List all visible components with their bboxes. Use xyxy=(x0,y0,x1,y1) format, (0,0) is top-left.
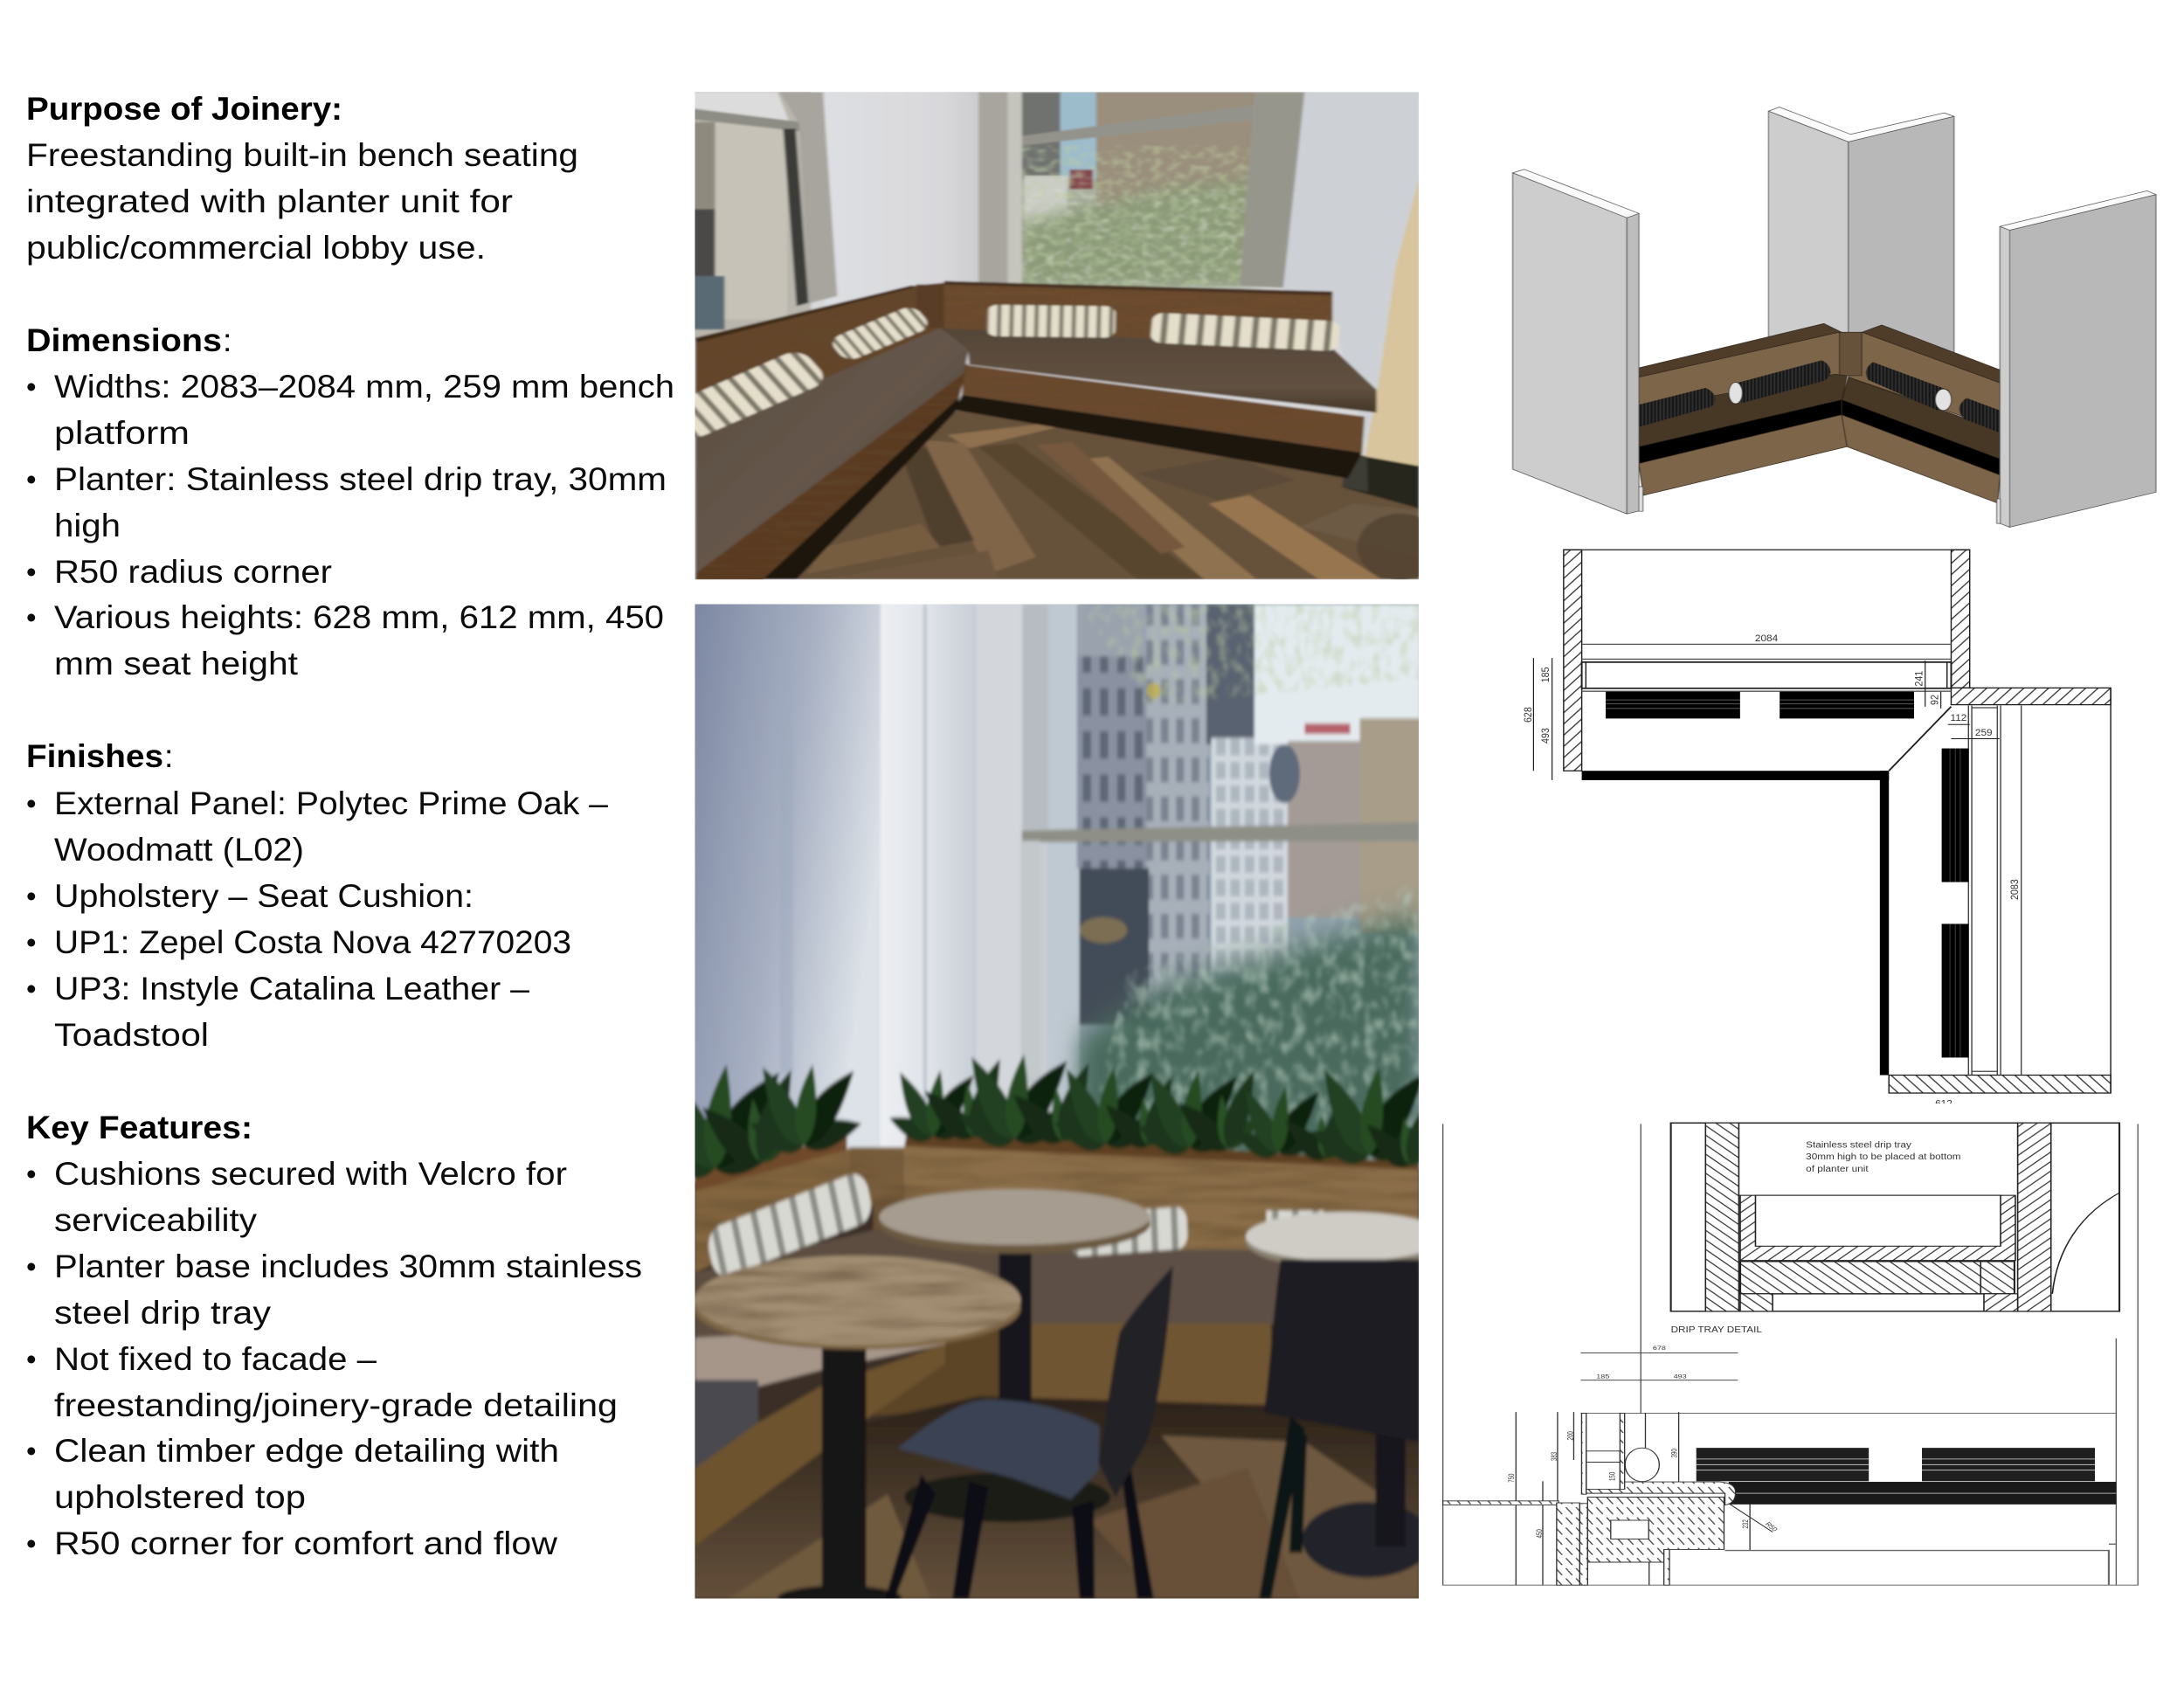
list: key features: steel drip tray xyxy=(54,1294,271,1331)
text block: purpose xyxy=(26,136,578,266)
list: dimensions: Widths: 2083–2084 mm, 259 mm bench xyxy=(54,368,674,405)
drip tray note xyxy=(1806,1139,1961,1173)
section dimension labels: 383 xyxy=(1550,1452,1559,1461)
list: dimensions: Various heights: 628 mm, 612 mm, 450 xyxy=(54,598,664,635)
section dimension labels: 232 xyxy=(1741,1519,1750,1529)
drip tray note: 30mm high to be placed at bottom xyxy=(1806,1151,1961,1161)
section dimension labels: 493 xyxy=(1674,1373,1687,1380)
heading: finishes: : xyxy=(164,737,173,774)
bench back lines xyxy=(1582,644,2022,1076)
section dimension labels: 678 xyxy=(1653,1346,1666,1352)
section dimension labels: 200 xyxy=(1565,1431,1575,1440)
table pedestals xyxy=(778,1236,1432,1611)
panel: specification text xyxy=(26,90,674,1561)
dimension labels: 493 xyxy=(1540,728,1552,744)
kick plinth xyxy=(955,395,1362,479)
list: finishes: • xyxy=(26,972,37,1005)
plants xyxy=(641,1046,1441,1185)
left window view xyxy=(681,79,837,340)
section bolsters and seat band xyxy=(1697,1448,2116,1505)
list: finishes: External Panel: Polytec Prime Oak – xyxy=(54,785,608,821)
list: key features: Planter base includes 30mm stainless xyxy=(54,1248,642,1284)
section dimension labels: R50 xyxy=(1763,1521,1780,1532)
list: key features: Clean timber edge detailing with xyxy=(54,1432,559,1469)
rear corner panels xyxy=(1768,107,1954,352)
list: dimensions: high xyxy=(54,507,121,543)
list: finishes: Toadstool xyxy=(54,1016,209,1053)
seat nose section xyxy=(1586,1482,1736,1505)
centre window view xyxy=(978,92,1310,287)
dimension labels: 2084 xyxy=(1755,633,1778,644)
drip tray note: of planter unit xyxy=(1806,1163,1869,1173)
section dimension labels: 750 xyxy=(1507,1474,1516,1483)
list: dimensions: mm seat height xyxy=(54,645,299,681)
dimension labels: 241 xyxy=(1914,671,1925,687)
baseboard xyxy=(1343,457,1420,508)
heading: dimensions: : xyxy=(223,322,232,358)
photo: corner bench with striped bolsters xyxy=(695,92,1419,580)
section dimension labels: 390 xyxy=(1669,1449,1679,1457)
section dimension labels: 150 xyxy=(1607,1472,1617,1481)
heading: dimensions: Dimensions xyxy=(26,322,222,358)
drip tray note: Stainless steel drip tray xyxy=(1806,1139,1911,1150)
dimension labels: 259 xyxy=(1975,729,1993,738)
list: key features: Not fixed to facade – xyxy=(54,1340,377,1377)
black seat edge xyxy=(1582,771,1889,1076)
mulch xyxy=(904,1132,1419,1169)
photo: cafe tables and planter bench at window xyxy=(695,605,1419,1599)
list: dimensions: • xyxy=(26,556,37,588)
dimension labels: 612 xyxy=(1935,1099,1952,1109)
dimension labels: 185 xyxy=(1540,667,1552,682)
black chairs xyxy=(885,1259,1419,1599)
timber back panels xyxy=(695,281,1365,580)
window sash xyxy=(1021,605,1419,1121)
list: key features: freestanding/joinery-grade detailing xyxy=(54,1387,618,1423)
list: finishes: Woodmatt (L02) xyxy=(54,831,304,868)
dimension labels: 112 xyxy=(1951,713,1966,723)
left wall panel xyxy=(1513,169,1643,514)
right wall xyxy=(1283,92,1420,481)
list: key features: • xyxy=(26,1250,37,1283)
caption: DRIP TRAY DETAIL xyxy=(1671,1325,1762,1335)
heading: finishes: Finishes xyxy=(26,737,163,774)
striped bolsters xyxy=(705,1169,1324,1281)
right wall panel xyxy=(1997,190,2156,527)
list: dimensions: • xyxy=(26,601,37,633)
list: finishes: UP3: Instyle Catalina Leather – xyxy=(54,970,529,1007)
list: finishes: UP1: Zepel Costa Nova 42770203 xyxy=(54,924,571,960)
plaster wall xyxy=(681,594,1051,1181)
list: dimensions: Planter: Stainless steel drip tray, 30mm xyxy=(54,460,667,497)
list: dimensions xyxy=(26,368,674,681)
list: key features: • xyxy=(26,1343,37,1375)
list: key features: • xyxy=(26,1435,37,1467)
text block: purpose: public/commercial lobby use. xyxy=(26,229,486,266)
dimension lines xyxy=(1533,658,2000,780)
list: dimensions: platform xyxy=(54,414,190,451)
drip tray detail xyxy=(1671,1123,2119,1311)
drawing: isometric view of bench between wall panels xyxy=(1511,107,2158,528)
list: dimensions: • xyxy=(26,463,37,495)
bolster cushions xyxy=(1606,692,1968,1057)
timber bench body xyxy=(1639,323,2000,503)
street view xyxy=(1048,594,1422,1168)
heading: purpose of joinery: Purpose of Joinery: xyxy=(26,90,342,127)
list: finishes: • xyxy=(26,926,37,958)
ribbed bolsters xyxy=(1639,360,2000,432)
bench backrest, seat and front xyxy=(695,1230,1281,1546)
list: key features: • xyxy=(26,1158,37,1190)
dimension labels: 92 xyxy=(1930,695,1941,705)
dimension labels: 628 xyxy=(1524,707,1534,723)
section dimension labels xyxy=(1507,1346,1780,1538)
leather seat xyxy=(695,328,968,574)
floor xyxy=(763,408,1444,580)
list: finishes: Upholstery – Seat Cushion: xyxy=(54,877,473,914)
text block: purpose: integrated with planter unit for xyxy=(26,183,513,219)
heading: key features: Key Features: xyxy=(26,1109,252,1145)
section through bench xyxy=(1443,1124,2138,1585)
dimension labels xyxy=(1524,633,2021,1109)
section dimension labels: 185 xyxy=(1596,1373,1609,1380)
list: finishes: • xyxy=(26,787,37,820)
list: key features xyxy=(26,1155,642,1561)
list: finishes xyxy=(26,785,608,1053)
dimension labels: 2083 xyxy=(2009,879,2021,900)
table tops xyxy=(694,1189,1445,1349)
list: key features: Cushions secured with Velcro for xyxy=(54,1155,567,1192)
striped bolster cushions xyxy=(660,304,1340,442)
planter timber xyxy=(695,1145,1419,1272)
list: key features: R50 corner for comfort and flow xyxy=(54,1525,558,1561)
drawing: plan view with dimensions xyxy=(1524,549,2111,1109)
list: key features: • xyxy=(26,1527,37,1560)
drawing: drip tray detail and section xyxy=(1441,1122,2139,1586)
list: dimensions: R50 radius corner xyxy=(54,553,332,590)
list: finishes: • xyxy=(26,880,37,912)
floor xyxy=(695,1396,1419,1599)
list: key features: upholstered top xyxy=(54,1478,306,1515)
list: dimensions: • xyxy=(26,370,37,403)
hatched walls xyxy=(1564,550,2111,1093)
section dimension labels: 450 xyxy=(1535,1529,1544,1538)
list: key features: serviceability xyxy=(54,1201,257,1238)
text block: purpose: Freestanding built-in bench seating xyxy=(26,136,578,173)
